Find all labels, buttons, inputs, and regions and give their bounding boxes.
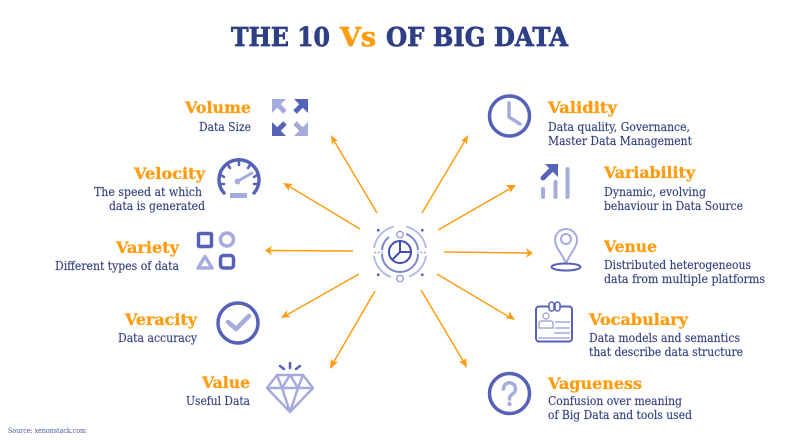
item: Validity bbox=[547, 98, 692, 148]
item: Variability bbox=[603, 163, 743, 213]
arrow: to Variability bbox=[438, 185, 516, 230]
item: Validity: Master Data Management bbox=[548, 134, 692, 148]
item: Variability: behaviour in Data Source bbox=[604, 199, 743, 213]
arrow: to Validity bbox=[422, 135, 468, 213]
icon: diamond bbox=[267, 363, 313, 412]
icon: expand arrows bbox=[272, 99, 308, 136]
source note: Source: xenonstack.com bbox=[8, 426, 86, 435]
item: Veracity bbox=[118, 310, 198, 345]
item: Velocity: The speed at which bbox=[94, 185, 202, 199]
title: Vs bbox=[339, 23, 376, 53]
item: Vagueness: Confusion over meaning bbox=[548, 394, 682, 408]
item: Vagueness: of Big Data and tools used bbox=[548, 408, 692, 422]
title: THE 10 bbox=[231, 23, 330, 53]
item: Volume: Data Size bbox=[199, 120, 251, 134]
item: Validity: Validity bbox=[547, 98, 618, 117]
item: Volume bbox=[184, 98, 251, 134]
item: Validity: Data quality, Governance, bbox=[548, 120, 690, 134]
arrow: to Vagueness bbox=[421, 290, 467, 368]
item: Venue: Venue bbox=[603, 237, 657, 256]
icon: shapes bbox=[198, 233, 234, 268]
item: Veracity: Veracity bbox=[124, 310, 198, 329]
icon: id card bbox=[536, 302, 572, 342]
item: Vocabulary: that describe data structure bbox=[589, 345, 743, 359]
item: Variety: Different types of data bbox=[55, 259, 179, 273]
item: Variety bbox=[55, 238, 180, 273]
item: Value: Useful Data bbox=[186, 394, 250, 408]
item: Veracity: Data accuracy bbox=[118, 331, 197, 345]
item: Volume: Volume bbox=[184, 98, 251, 117]
arrow: to Venue bbox=[444, 248, 533, 258]
item: Vagueness bbox=[547, 374, 692, 422]
icon: rising bars bbox=[543, 164, 568, 197]
central data icon bbox=[374, 227, 427, 282]
item: Venue bbox=[603, 237, 765, 286]
item: Velocity: data is generated bbox=[109, 199, 205, 213]
item: Velocity bbox=[94, 164, 206, 213]
arrow: to Velocity bbox=[283, 183, 360, 229]
icon: location pin bbox=[552, 229, 580, 270]
item: Velocity: Velocity bbox=[133, 164, 206, 183]
title: OF BIG DATA bbox=[386, 23, 569, 53]
item: Venue: Distributed heterogeneous bbox=[604, 258, 751, 272]
item: Value bbox=[186, 373, 250, 408]
icon: question circle bbox=[490, 374, 530, 414]
arrow: to Veracity bbox=[281, 274, 359, 318]
title bbox=[231, 23, 569, 53]
arrow: to Volume bbox=[331, 135, 377, 213]
item: Variability: Variability bbox=[603, 163, 696, 182]
icon: speedometer bbox=[219, 160, 259, 198]
item: Variety: Variety bbox=[115, 238, 180, 257]
item: Venue: data from multiple platforms bbox=[604, 272, 765, 286]
item: Vocabulary: Data models and semantics bbox=[589, 331, 740, 345]
item: Variability: Dynamic, evolving bbox=[604, 185, 706, 199]
item: Vocabulary bbox=[588, 310, 743, 359]
arrows bbox=[265, 135, 533, 369]
icon: check circle bbox=[218, 303, 258, 343]
icon: clock bbox=[490, 96, 530, 136]
item: Vagueness: Vagueness bbox=[547, 374, 642, 393]
arrow: to Value bbox=[330, 291, 375, 369]
item: Vocabulary: Vocabulary bbox=[588, 310, 689, 329]
item: Value: Value bbox=[201, 373, 250, 392]
arrow: to Variety bbox=[265, 246, 353, 256]
arrow: to Vocabulary bbox=[437, 274, 515, 320]
